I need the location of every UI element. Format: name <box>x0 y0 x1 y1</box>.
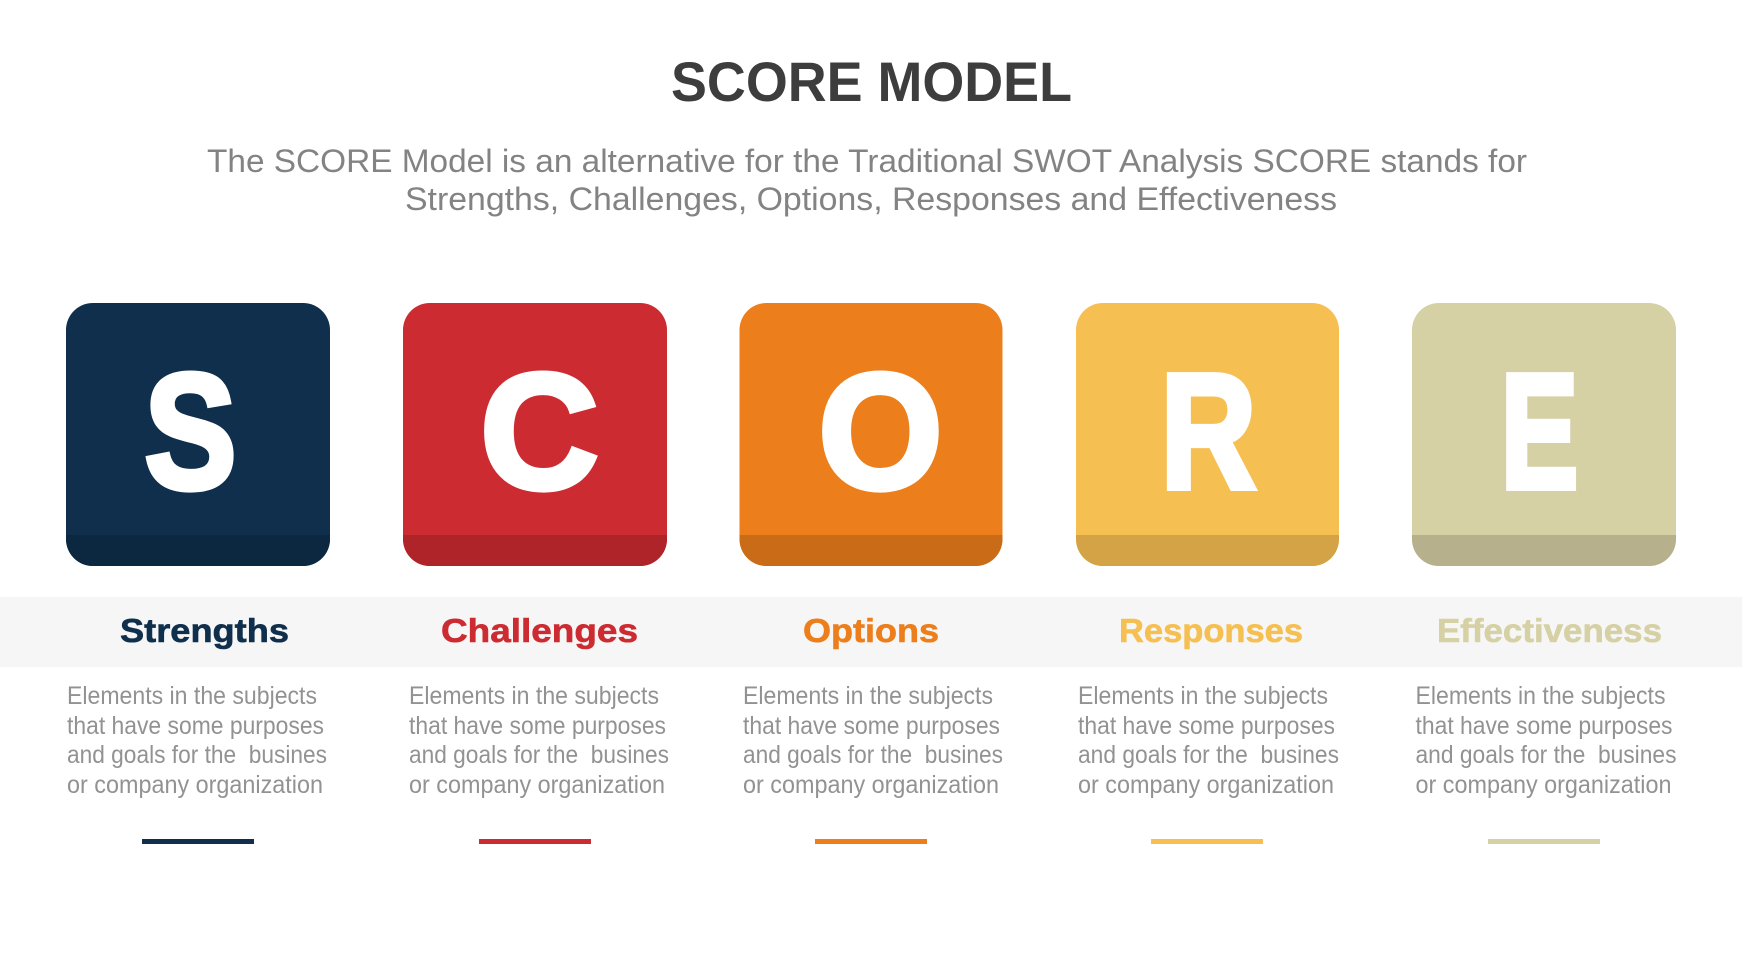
panel: strengths <box>66 303 330 844</box>
description: that have some purposes <box>1078 712 1335 740</box>
panel: options <box>740 303 1003 844</box>
description: or company organization <box>409 771 665 799</box>
description: or company organization <box>67 771 323 799</box>
description: or company organization <box>743 771 999 799</box>
heading: Responses: Responses <box>1119 612 1303 649</box>
description: that have some purposes <box>409 712 666 740</box>
card: S: S <box>144 340 236 523</box>
card: R <box>1076 303 1339 566</box>
card: C: C <box>480 340 598 523</box>
heading: Challenges: Challenges <box>441 612 638 649</box>
description: and goals for the busines <box>1078 741 1339 769</box>
card: C <box>403 303 667 566</box>
description <box>1078 682 1339 799</box>
subtitle: The SCORE Model is an alternative for the Traditional SWOT Analysis SCORE stands for <box>207 143 1527 179</box>
card: O <box>740 303 1003 566</box>
description <box>743 682 1003 799</box>
card: O: O <box>818 340 942 523</box>
heading: Effectiveness: Effectiveness <box>1437 612 1662 649</box>
description: Elements in the subjects <box>1416 682 1666 710</box>
description: that have some purposes <box>743 712 1000 740</box>
subtitle <box>207 143 1527 217</box>
accent line <box>479 839 591 844</box>
description: Elements in the subjects <box>67 682 317 710</box>
subtitle: Strengths, Challenges, Options, Responses and Effectiveness <box>405 181 1337 217</box>
card: S <box>66 303 330 566</box>
description: that have some purposes <box>1416 712 1672 740</box>
description: or company organization <box>1078 771 1334 799</box>
heading: Options: Options <box>803 612 939 649</box>
description: Elements in the subjects <box>743 682 993 710</box>
accent line <box>1151 839 1263 844</box>
description: and goals for the busines <box>743 741 1003 769</box>
description <box>409 682 669 799</box>
description: or company organization <box>1416 771 1672 799</box>
card: E: E <box>1500 340 1578 523</box>
accent line <box>1488 839 1600 844</box>
description: that have some purposes <box>67 712 324 740</box>
description: and goals for the busines <box>409 741 669 769</box>
panel: responses <box>1076 303 1339 844</box>
panel: effectiveness <box>1412 303 1676 844</box>
description <box>67 682 327 799</box>
description: Elements in the subjects <box>1078 682 1328 710</box>
card: E <box>1412 303 1676 566</box>
accent line <box>815 839 927 844</box>
description: and goals for the busines <box>1416 741 1676 769</box>
accent line <box>142 839 254 844</box>
description: and goals for the busines <box>67 741 327 769</box>
heading band <box>0 597 1742 667</box>
description <box>1416 682 1676 799</box>
panel: challenges <box>403 303 669 844</box>
heading: Strengths: Strengths <box>120 612 289 649</box>
title: SCORE MODEL <box>671 50 1072 113</box>
card: R: R <box>1160 340 1256 523</box>
description: Elements in the subjects <box>409 682 659 710</box>
